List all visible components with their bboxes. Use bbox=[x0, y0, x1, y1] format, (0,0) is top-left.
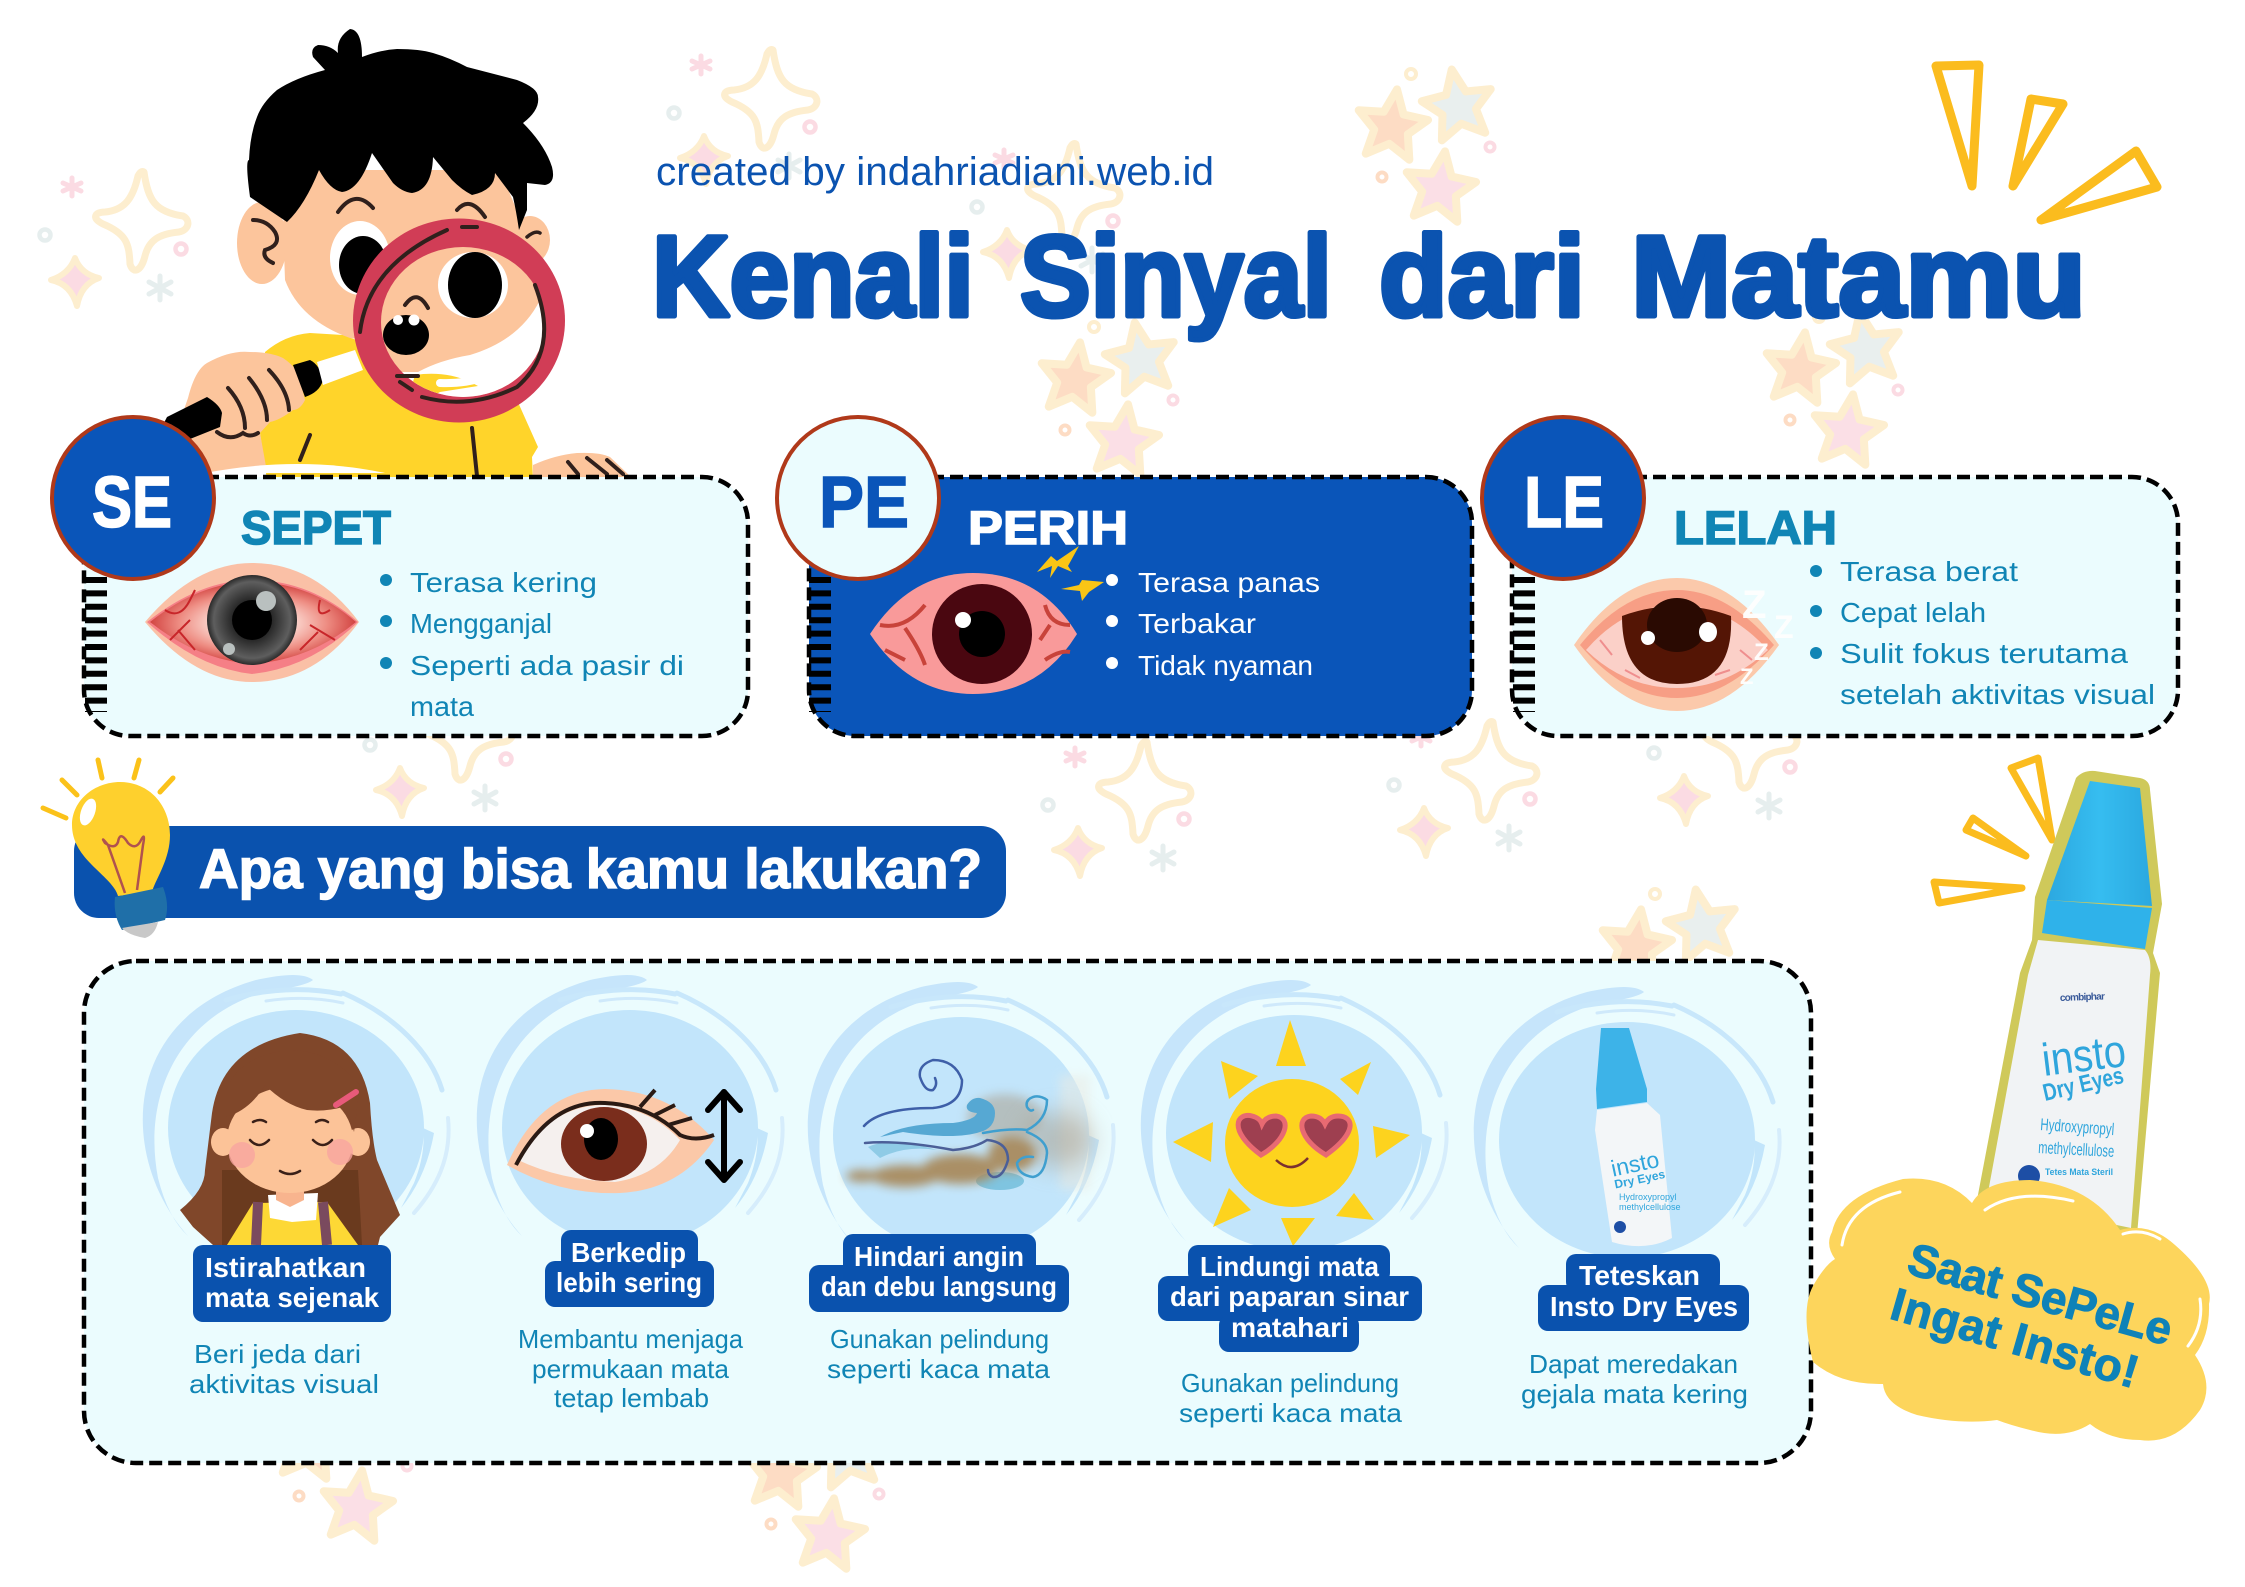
panel: sepet bbox=[84, 477, 748, 736]
second hand bbox=[533, 453, 632, 478]
label: Hindari angin bbox=[854, 1241, 1024, 1272]
product label: insto bbox=[2039, 1024, 2129, 1086]
badge: SE bbox=[52, 417, 214, 579]
icon: small bottle: Hydroxypropyl bbox=[1619, 1192, 1677, 1202]
label bbox=[809, 1234, 1069, 1312]
callout text: Ingat Insto! bbox=[1885, 1278, 2145, 1398]
symptom list: Sulit fokus terutama bbox=[1840, 638, 2128, 669]
boy with magnifying glass bbox=[150, 29, 632, 480]
icon: small bottle: insto bbox=[1609, 1146, 1661, 1182]
badge: PE bbox=[777, 417, 939, 579]
heading: SEPET bbox=[241, 501, 391, 554]
product label: Dry Eyes bbox=[2040, 1062, 2126, 1107]
description: Dapat meredakan bbox=[1529, 1349, 1738, 1379]
icon: sleepy Z letters: Z bbox=[1742, 583, 1766, 627]
shirt bbox=[260, 333, 538, 480]
product label: methylcellulose bbox=[2038, 1138, 2115, 1161]
description: gejala mata kering bbox=[1521, 1379, 1748, 1409]
icon: sleepy Z letters bbox=[1740, 583, 1794, 689]
description bbox=[189, 1339, 379, 1399]
icon: lightning bolts bbox=[1037, 546, 1104, 601]
hair bbox=[247, 29, 553, 230]
badge: SE: SE bbox=[92, 463, 172, 543]
heading: PERIH bbox=[968, 501, 1128, 554]
shirt lines bbox=[300, 428, 477, 476]
description: Membantu menjaga bbox=[518, 1324, 744, 1354]
head bbox=[283, 170, 525, 350]
label: Teteskan bbox=[1579, 1260, 1700, 1291]
icon: dry red eye bbox=[145, 563, 359, 682]
callout text bbox=[1885, 1233, 2178, 1398]
icon: light bulb bbox=[43, 760, 173, 938]
badge: LE: LE bbox=[1524, 463, 1604, 543]
item: blink bbox=[477, 975, 783, 1413]
description: Beri jeda dari bbox=[194, 1339, 361, 1369]
arm and hand bbox=[170, 352, 305, 472]
description bbox=[1179, 1368, 1403, 1428]
symptom list: Seperti ada pasir di bbox=[410, 650, 684, 681]
label: Berkedip bbox=[571, 1237, 686, 1268]
label: matahari bbox=[1231, 1312, 1349, 1343]
background stars bbox=[40, 50, 1906, 1571]
label: Lindungi mata bbox=[1200, 1251, 1379, 1282]
credit line: created by indahriadiani.web.id bbox=[656, 150, 1214, 194]
symptom list: Terbakar bbox=[1138, 608, 1256, 639]
accent rays top right bbox=[1936, 65, 2157, 220]
heading: LELAH bbox=[1674, 501, 1837, 554]
section banner: Apa yang bisa kamu lakukan? bbox=[199, 837, 982, 900]
icon: wind and dust bbox=[846, 1060, 1092, 1190]
icon: small bottle: Dry Eyes bbox=[1613, 1167, 1667, 1191]
title bbox=[652, 213, 2086, 341]
symptom list bbox=[1810, 556, 2155, 710]
eyebrows bbox=[338, 199, 485, 217]
badge: LE bbox=[1482, 417, 1644, 579]
icon: eye with arrow bbox=[507, 1089, 740, 1193]
accent rays by bottle bbox=[1934, 758, 2052, 903]
item: insto drops bbox=[1474, 987, 1780, 1409]
icon: small bottle bbox=[1595, 1028, 1681, 1246]
icon: sleepy Z letters: Z bbox=[1740, 664, 1753, 689]
label: Istirahatkan bbox=[205, 1252, 366, 1283]
badge: PE: PE bbox=[819, 463, 909, 543]
description bbox=[518, 1324, 744, 1413]
product label: combiphar bbox=[2060, 991, 2105, 1004]
label: lebih sering bbox=[556, 1267, 702, 1298]
description bbox=[827, 1324, 1051, 1384]
label: dan debu langsung bbox=[821, 1271, 1057, 1302]
right ear bbox=[510, 216, 550, 264]
left eye bbox=[330, 221, 390, 295]
symptom list: Terasa kering bbox=[410, 567, 597, 598]
panel: lelah bbox=[1512, 477, 2178, 736]
icon: sleepy Z letters: Z bbox=[1774, 609, 1794, 645]
callout bubble bbox=[1806, 1178, 2210, 1441]
symptom list: Terasa berat bbox=[1840, 556, 2018, 587]
label bbox=[193, 1245, 391, 1322]
description: permukaan mata bbox=[532, 1354, 730, 1384]
description: seperti kaca mata bbox=[1179, 1398, 1403, 1428]
symptom list bbox=[1106, 567, 1320, 681]
label: Insto Dry Eyes bbox=[1550, 1291, 1738, 1322]
label: mata sejenak bbox=[205, 1282, 379, 1313]
item: wind and dust bbox=[808, 982, 1114, 1384]
icon: sleepy Z letters: Z bbox=[1754, 639, 1769, 666]
description: Gunakan pelindung bbox=[830, 1324, 1049, 1354]
label bbox=[1538, 1254, 1749, 1331]
left ear bbox=[237, 202, 287, 284]
panel: perih bbox=[809, 477, 1472, 736]
callout text: Saat SePeLe bbox=[1902, 1233, 2178, 1355]
magnifying lens bbox=[353, 218, 565, 422]
symptom list: Mengganjal bbox=[410, 608, 552, 639]
title: Kenali bbox=[652, 213, 974, 341]
symptom list: setelah aktivitas visual bbox=[1840, 679, 2155, 710]
symptom list: mata bbox=[410, 691, 474, 722]
icon: burning eye bbox=[870, 573, 1077, 694]
title: dari bbox=[1379, 213, 1585, 341]
description bbox=[1521, 1349, 1748, 1409]
symptom list: Cepat lelah bbox=[1840, 597, 1986, 628]
description: Gunakan pelindung bbox=[1181, 1368, 1399, 1398]
description: tetap lembab bbox=[554, 1383, 709, 1413]
item: rest bbox=[143, 975, 449, 1399]
symptom list bbox=[380, 567, 684, 722]
product label bbox=[2038, 991, 2129, 1177]
label bbox=[1158, 1245, 1422, 1352]
product label: Tetes Mata Steril bbox=[2045, 1167, 2113, 1177]
section banner bbox=[74, 826, 1006, 918]
product bottle bbox=[1977, 771, 2162, 1235]
symptom list: Terasa panas bbox=[1138, 567, 1320, 598]
description: aktivitas visual bbox=[189, 1369, 379, 1399]
handle bbox=[150, 350, 363, 450]
description: seperti kaca mata bbox=[827, 1354, 1051, 1384]
title: Sinyal bbox=[1020, 213, 1332, 341]
symptom list: Tidak nyaman bbox=[1138, 650, 1313, 681]
panel: actions bbox=[84, 961, 1811, 1463]
item: sun protection bbox=[1141, 980, 1447, 1428]
product label: Hydroxypropyl bbox=[2040, 1115, 2115, 1139]
icon: tired eye bbox=[1574, 578, 1779, 711]
title: Matamu bbox=[1631, 213, 2086, 341]
icon: sun with heart glasses bbox=[1173, 1020, 1410, 1246]
label: dari paparan sinar bbox=[1170, 1281, 1409, 1312]
label bbox=[545, 1230, 714, 1307]
icon: small bottle: methylcellulose bbox=[1619, 1202, 1681, 1212]
icon: girl bbox=[180, 1033, 400, 1245]
